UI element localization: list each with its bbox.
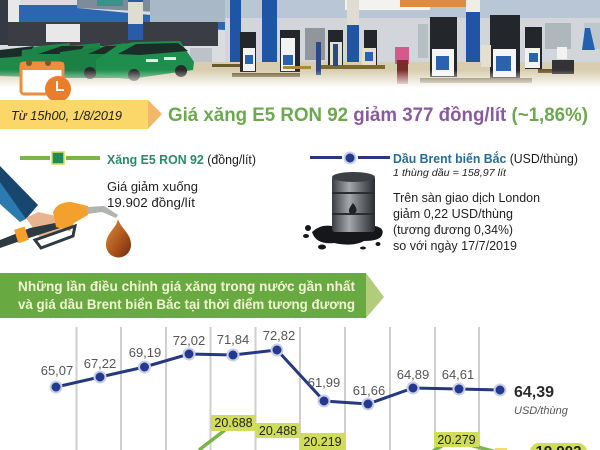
- legend: Brent oil: [310, 150, 578, 179]
- text: Brent change: (tương đương 0,34%): [393, 222, 513, 237]
- Brent values: 61,99: [308, 375, 340, 390]
- Brent values: 71,84: [217, 332, 249, 347]
- petrol value labels: 20.219: [303, 435, 342, 449]
- line chart: Brent and petrol prices: [41, 327, 587, 450]
- legend: Brent oil: Dầu Brent biến Bắc (USD/thùng): [393, 151, 578, 166]
- legend: petrol: [20, 151, 256, 167]
- Brent values: 72,82: [263, 328, 295, 343]
- section heading banner: Những lần điều chỉnh giá xăng trong nước gần nhất: [18, 278, 355, 294]
- section heading banner: và giá dầu Brent biển Bắc tại thời điểm tương đương: [18, 295, 355, 312]
- Brent markers: [50, 344, 506, 410]
- text: petrol price: Giá giảm xuống: [107, 179, 198, 194]
- Brent values: 64,61: [442, 367, 474, 382]
- Brent values: 64,89: [397, 367, 429, 382]
- petrol value labels: [211, 415, 479, 450]
- icon: oil barrel with spill: [303, 172, 383, 250]
- Brent values: 67,22: [84, 356, 116, 371]
- taxis: [0, 43, 70, 78]
- Brent values: [41, 328, 474, 398]
- text: Brent change: so với ngày 17/7/2019: [393, 238, 517, 253]
- section heading banner: [0, 273, 384, 318]
- latest Brent value: [514, 384, 569, 417]
- Brent values: 72,02: [173, 333, 205, 348]
- date ribbon: [0, 100, 162, 129]
- text: Brent change: [393, 190, 540, 253]
- legend: Brent oil: 1 thùng dầu = 158,97 lít: [393, 167, 507, 179]
- Brent values: 69,19: [129, 345, 161, 360]
- petrol value labels: 20.688: [214, 416, 253, 430]
- latest Brent value: USD/thùng: [514, 405, 569, 417]
- text: petrol price: 19.902 đồng/lít: [107, 195, 195, 210]
- text: petrol price: [107, 179, 198, 210]
- date ribbon: Từ 15h00, 1/8/2019: [11, 108, 122, 123]
- fade to white: [0, 70, 600, 88]
- text: Brent change: Trên sàn giao dịch London: [393, 190, 540, 205]
- legend: petrol: Xăng E5 RON 92 (đồng/lít): [107, 153, 256, 167]
- latest Brent value: 64,39: [514, 384, 554, 401]
- Brent values: 65,07: [41, 363, 73, 378]
- Brent line: [56, 350, 500, 404]
- petrol value labels: 20.488: [259, 424, 297, 438]
- Brent values: 61,66: [353, 383, 385, 398]
- title: Giá xăng E5 RON 92 giảm 377 đồng/lít (~1,86%): [168, 105, 588, 126]
- petrol line: [199, 430, 500, 450]
- text: Brent change: giảm 0,22 USD/thùng: [393, 206, 513, 221]
- petrol marker: [495, 448, 507, 450]
- petrol value labels: 20.279: [437, 433, 476, 447]
- photo: petrol station header: [0, 0, 600, 88]
- icon: fuel nozzle with drop: [0, 166, 131, 258]
- icon: calendar and clock: [20, 60, 71, 102]
